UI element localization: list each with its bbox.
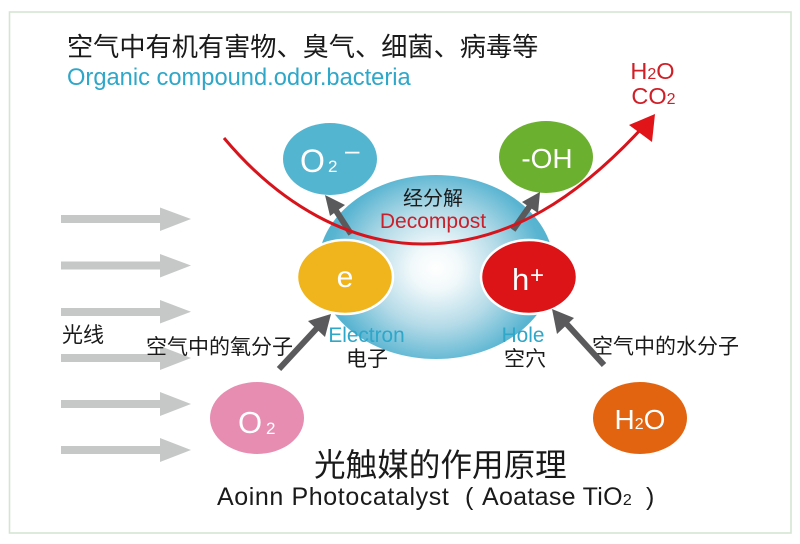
label: decompose: 经分解	[403, 187, 463, 210]
heading: English: Organic compound.odor.bacteria	[67, 65, 412, 91]
bubble: superoxide: O	[300, 143, 325, 179]
label: electron	[328, 324, 405, 371]
bubble: superoxide: 2	[328, 157, 337, 176]
title: English: Aoinn Photocatalyst	[217, 483, 449, 511]
label: electron: Electron	[328, 324, 405, 347]
arrow: oxygen to electron	[279, 314, 331, 369]
title: English: (	[465, 483, 474, 511]
label: oxygen molecules in air: 空气中的氧分子	[146, 336, 293, 359]
bubble: hydroxyl	[499, 121, 593, 193]
bubble: hole	[481, 240, 577, 314]
heading: Chinese: 空气中有机有害物、臭气、细菌、病毒等	[67, 32, 538, 62]
label: products: H2O	[630, 58, 675, 84]
label: water molecules in air: 空气中的水分子	[592, 336, 739, 358]
bubble: superoxide: –	[345, 135, 360, 165]
arrow: electron to superoxide	[325, 195, 351, 234]
arrow: water to hole	[552, 309, 604, 365]
label: hole: 空穴	[504, 348, 546, 371]
title: English: 2	[623, 492, 632, 509]
bubble: oxygen: O	[238, 405, 262, 440]
red arrowhead	[629, 114, 655, 142]
title: English: Aoatase TiO	[482, 483, 623, 511]
light arrow 5	[61, 392, 191, 416]
title: English: )	[646, 483, 654, 511]
label: electron: 电子	[346, 348, 388, 371]
light arrow 2	[61, 254, 191, 278]
light arrow 1	[61, 208, 191, 231]
bubble: electron: e	[337, 261, 353, 294]
bubble: hole: h	[512, 262, 529, 297]
label: hole: Hole	[502, 324, 544, 347]
bubble: hole: +	[530, 262, 544, 289]
central sphere	[318, 175, 554, 359]
red decomposition curve	[224, 114, 655, 244]
bottom title	[217, 447, 654, 511]
bubble: oxygen	[210, 382, 304, 454]
top heading	[67, 32, 538, 91]
light arrow 6	[61, 438, 191, 462]
label: decompose: Decompost	[380, 210, 486, 233]
arrow: hole to hydroxyl	[513, 192, 540, 230]
label: products: CO2	[631, 83, 676, 109]
bubble: hydroxyl: -OH	[521, 143, 573, 174]
title: Chinese: 光触媒的作用原理	[314, 447, 567, 483]
light arrow 3	[61, 300, 191, 324]
bubble: water	[593, 382, 687, 454]
bubble: oxygen: 2	[266, 419, 275, 438]
label: products	[630, 58, 676, 109]
label: hole	[502, 324, 546, 371]
light arrow 4	[61, 346, 191, 370]
bubble: electron	[297, 240, 393, 314]
bubble: water: H2O	[615, 404, 665, 435]
bubble: superoxide	[283, 123, 377, 195]
label: light: 光线	[62, 324, 104, 347]
light arrows	[61, 208, 191, 462]
label: decompose	[380, 187, 486, 233]
